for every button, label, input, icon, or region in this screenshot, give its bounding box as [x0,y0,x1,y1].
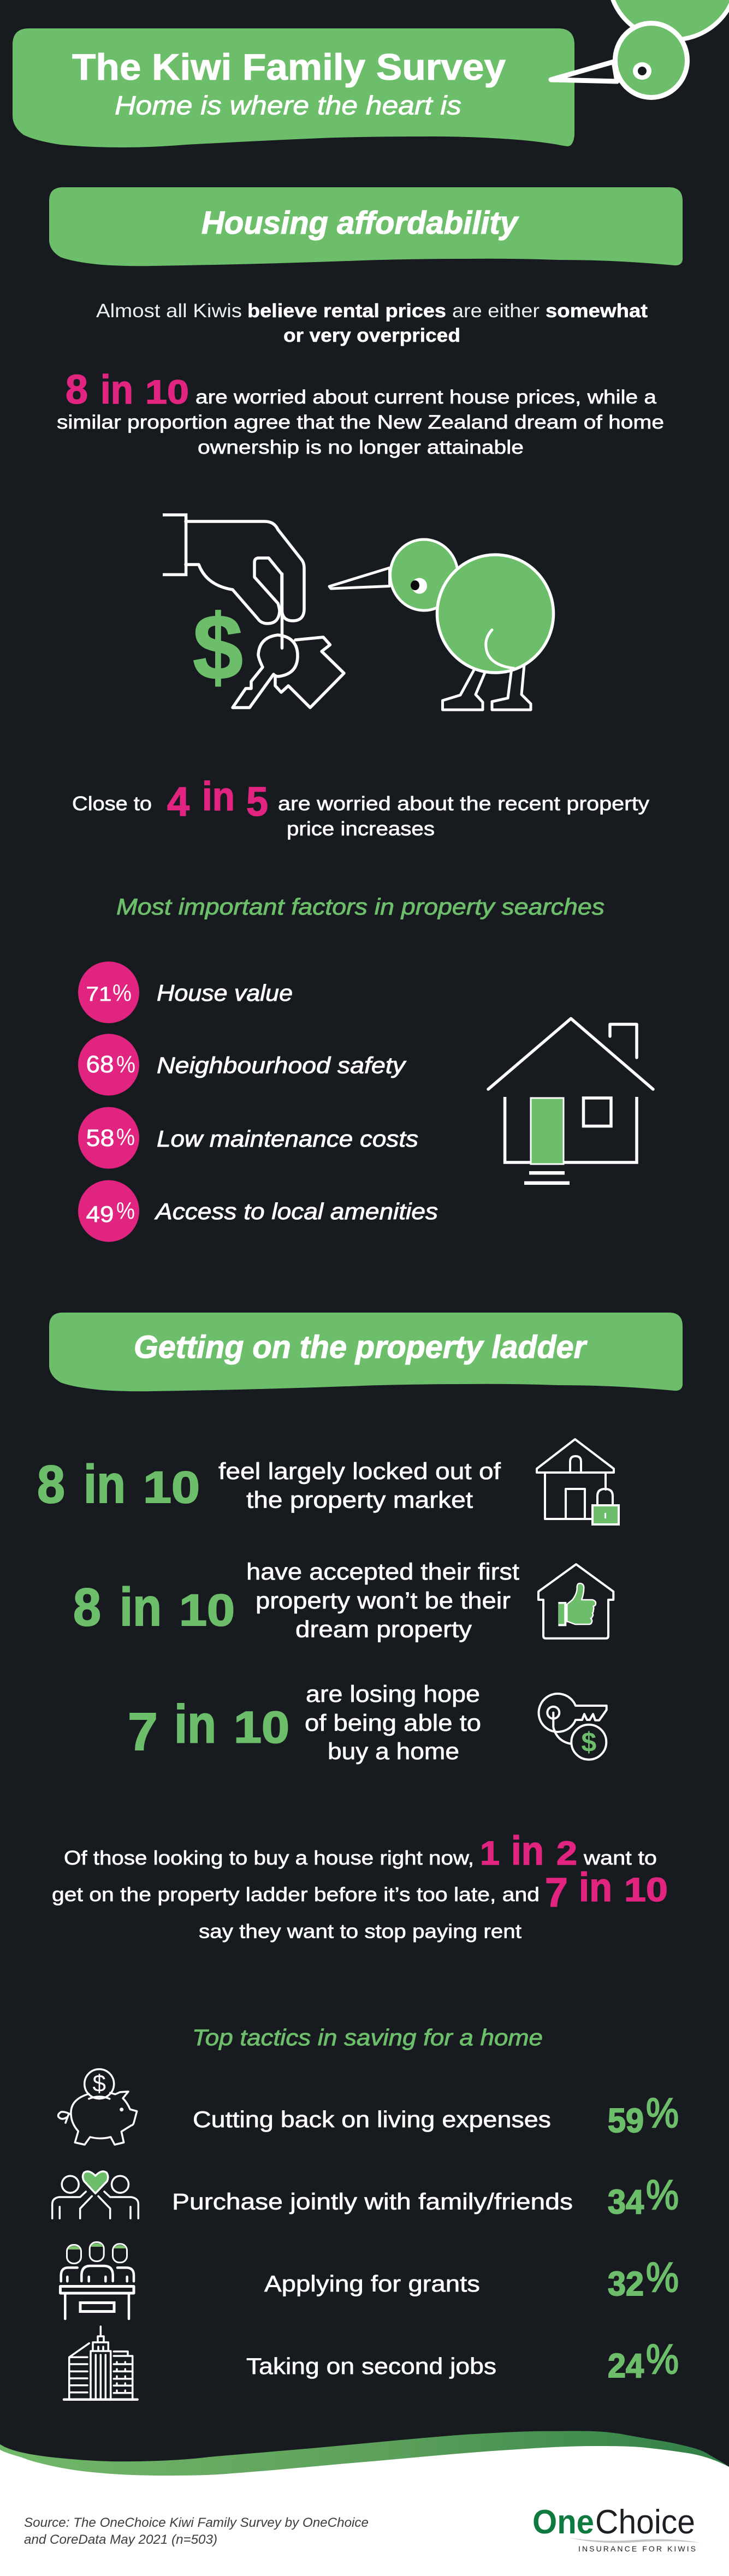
stat row: 8 in 10 locked out: in [84,1454,126,1514]
text block: 4 in 5 worried: 5 [246,779,268,824]
source note: and CoreData May 2021 (n=503) [24,2532,217,2547]
list: 49% access to local amenities: Access to local amenities [154,1198,438,1224]
icon: two people with heart [52,2171,138,2218]
stat row: 8 in 10 accepted first property: have accepted their first [246,1559,519,1585]
stat row: 7 in 10 losing hope: of being able to [305,1710,481,1736]
text block: 4 in 5 worried: price increases [287,817,435,840]
stat row: 8 in 10 accepted first property: 10 [179,1586,235,1635]
stat row: 8 in 10 locked out: the property market [246,1487,473,1513]
text block: rental prices [96,300,648,346]
list: 68% neighbourhood safety: % [116,1051,135,1078]
text block: 1 in 2 and 7 in 10: 1 [480,1835,500,1872]
heading: most important factors: Most important factors in property searches [116,894,604,919]
logo: OneChoice [532,2503,700,2553]
icon: house with padlock [537,1439,619,1524]
stat row: 7 in 10 losing hope: 7 [128,1702,158,1761]
heading: top tactics: Top tactics in saving for a home [192,2025,543,2050]
icon: kiwi peeking from top [551,0,729,97]
list: 68% neighbourhood safety: Neighbourhood safety [157,1053,407,1078]
icon: key with dollar coin: $ [581,1727,596,1758]
tactic row: applying for grants: % [646,2254,679,2301]
icon: house with thumbs up [538,1564,613,1639]
list: 71% house value: % [112,980,132,1006]
text block: 4 in 5 worried: 4 [167,779,189,824]
stat row: 7 in 10 losing hope: in [174,1694,216,1754]
list: 58% low maintenance costs: % [116,1124,135,1150]
text block: 1 in 2 and 7 in 10: get on the property ladder before it’s too late, and [52,1883,540,1906]
stat row: 8 in 10 locked out: 8 [37,1455,65,1514]
tactic row: second jobs: % [646,2336,679,2383]
icon: kiwi bird [329,539,554,710]
list: 58% low maintenance costs [78,1107,418,1168]
stat row: 8 in 10 accepted first property: 8 [73,1577,101,1637]
stat row: 7 in 10 losing hope: buy a home [328,1738,459,1765]
tactic row: second jobs: 24 [608,2347,644,2385]
list: 49% access to local amenities [78,1180,438,1242]
banner heading: Housing affordability [201,205,519,241]
list: 68% neighbourhood safety: 68 [86,1051,114,1078]
text block: 4 in 5 worried [72,774,649,840]
text block: 4 in 5 worried: Close to [72,792,152,815]
icon: piggy bank [58,2069,137,2145]
text block: 1 in 2 and 7 in 10: 10 [624,1871,668,1908]
tactic row: applying for grants [264,2254,679,2303]
title: The Kiwi Family Survey [72,46,506,88]
icon: dollar sign: $ [193,596,243,699]
stat row: 8 in 10 locked out: 10 [143,1463,200,1512]
logo: OneChoice: INSURANCE FOR KIWIS [578,2544,696,2553]
title banner [13,28,574,147]
text block: 1 in 2 and 7 in 10: in [579,1865,612,1910]
text block: 1 in 2 and 7 in 10: Of those looking to buy a house right now, [64,1847,474,1869]
text block: 8 in 10 worried about house prices: in [100,367,133,412]
icon: piggy bank: $ [92,2070,106,2097]
section banner: housing affordability [49,187,683,266]
source note: Source: The OneChoice Kiwi Family Survey by OneChoice [24,2515,369,2530]
text block: rental prices: Almost all Kiwis [96,300,242,322]
text block: 1 in 2 and 7 in 10: want to [583,1847,657,1869]
section banner: getting on the property ladder [49,1313,683,1391]
text block: 8 in 10 worried about house prices: similar proportion agree that the New Zealand dream of home [57,412,664,433]
tactic row: purchase jointly [172,2172,679,2221]
logo: OneChoice: One [532,2503,594,2541]
banner heading: Getting on the property ladder [134,1329,588,1365]
list: 71% house value: House value [157,980,293,1006]
stat row: 8 in 10 accepted first property: dream property [295,1616,472,1642]
text block: rental prices: somewhat [546,300,648,322]
text block: 8 in 10 worried about house prices: are worried about current house prices, while a [195,387,657,408]
list: 49% access to local amenities: 49 [86,1201,114,1227]
text block: 4 in 5 worried: in [202,774,235,819]
tactic row: purchase jointly: % [646,2172,679,2218]
stat row: 7 in 10 losing hope: are losing hope [306,1681,480,1707]
logo: OneChoice: Choice [595,2503,695,2541]
stat row: 8 in 10 locked out [37,1454,501,1514]
text block: 8 in 10 worried about house prices: ownership is no longer attainable [198,437,524,458]
tactic row: second jobs: Taking on second jobs [246,2353,496,2379]
stat row: 8 in 10 accepted first property [73,1559,519,1642]
tactic row: applying for grants: Applying for grants [264,2271,480,2296]
text block: 1 in 2 and 7 in 10: 2 [556,1835,577,1872]
list: 58% low maintenance costs: 58 [86,1125,115,1152]
tactic row: cutting back [193,2090,679,2140]
tactic row: purchase jointly: 34 [608,2183,644,2221]
stat row: 8 in 10 locked out: feel largely locked out of [218,1458,501,1485]
stat row: 7 in 10 losing hope [128,1681,481,1765]
text block: 1 in 2 and 7 in 10: 7 [545,1869,568,1915]
text block: 1 in 2 and 7 in 10: say they want to stop paying rent [199,1920,521,1943]
text block: 1 in 2 and 7 in 10: in [511,1828,544,1873]
list: 71% house value: 71 [86,983,111,1005]
list: 58% low maintenance costs: Low maintenance costs [157,1126,418,1152]
icon: key with dollar coin [539,1694,607,1760]
icon: people at a table [60,2242,134,2319]
text block: rental prices: are either [452,300,540,322]
tactic row: cutting back: % [646,2090,679,2136]
icon: hand holding keys [163,515,344,708]
stat row: 8 in 10 accepted first property: in [120,1577,162,1637]
source note [24,2515,369,2547]
stat row: 8 in 10 accepted first property: property won’t be their [256,1588,511,1614]
icon: house with green door [488,1019,653,1185]
text block: 8 in 10 worried about house prices: 10 [145,373,189,411]
subtitle: Home is where the heart is [115,92,461,120]
stat row: 7 in 10 losing hope: 10 [234,1702,289,1753]
text block: rental prices: or very overpriced [283,325,460,346]
tactic row: cutting back: Cutting back on living expenses [193,2106,551,2132]
list: 71% house value [78,961,293,1023]
tactic row: second jobs [246,2336,679,2385]
icon: city buildings [64,2326,138,2400]
list: 49% access to local amenities: % [116,1197,135,1224]
footer wave [0,2431,729,2576]
tactic row: cutting back: 59 [608,2102,644,2140]
list: 68% neighbourhood safety [78,1034,407,1095]
tactic row: purchase jointly: Purchase jointly with family/friends [172,2188,573,2215]
text block: 8 in 10 worried about house prices [57,366,664,458]
text block: rental prices: believe rental prices [247,300,446,322]
text block: 8 in 10 worried about house prices: 8 [66,366,88,412]
text block: 1 in 2 and 7 in 10 [52,1828,668,1943]
tactic row: applying for grants: 32 [608,2265,644,2303]
text block: 4 in 5 worried: are worried about the recent property [278,792,649,815]
